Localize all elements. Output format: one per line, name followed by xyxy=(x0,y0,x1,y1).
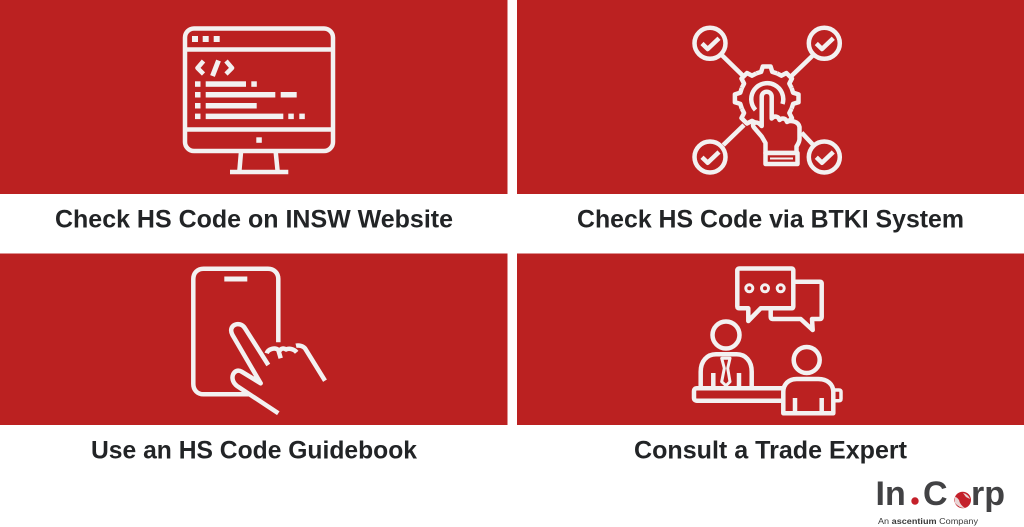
heading: trade expert: Consult a Trade Expert xyxy=(634,436,908,464)
heading: INSW website: Check HS Code on INSW Website xyxy=(55,206,453,234)
panel: trade expert xyxy=(517,254,1024,425)
logo: InCorp xyxy=(876,475,1005,526)
panel: INSW website xyxy=(0,0,508,194)
logo: InCorp: In xyxy=(876,475,906,513)
heading: BTKI system: Check HS Code via BTKI System xyxy=(577,206,964,234)
heading: guidebook: Use an HS Code Guidebook xyxy=(91,436,417,464)
panel: guidebook xyxy=(0,254,508,425)
panel: BTKI system xyxy=(517,0,1024,194)
logo: InCorp: An ascentium Company xyxy=(878,516,979,526)
icon: gear with pointing hand and four check circles xyxy=(694,28,840,172)
icon: smartphone with tapping hand xyxy=(193,269,325,413)
logo: InCorp: rp xyxy=(971,475,1005,513)
logo: InCorp: C xyxy=(923,475,948,513)
icon: computer monitor with code xyxy=(185,28,333,172)
icon: two people consulting with speech bubbles xyxy=(694,268,841,413)
